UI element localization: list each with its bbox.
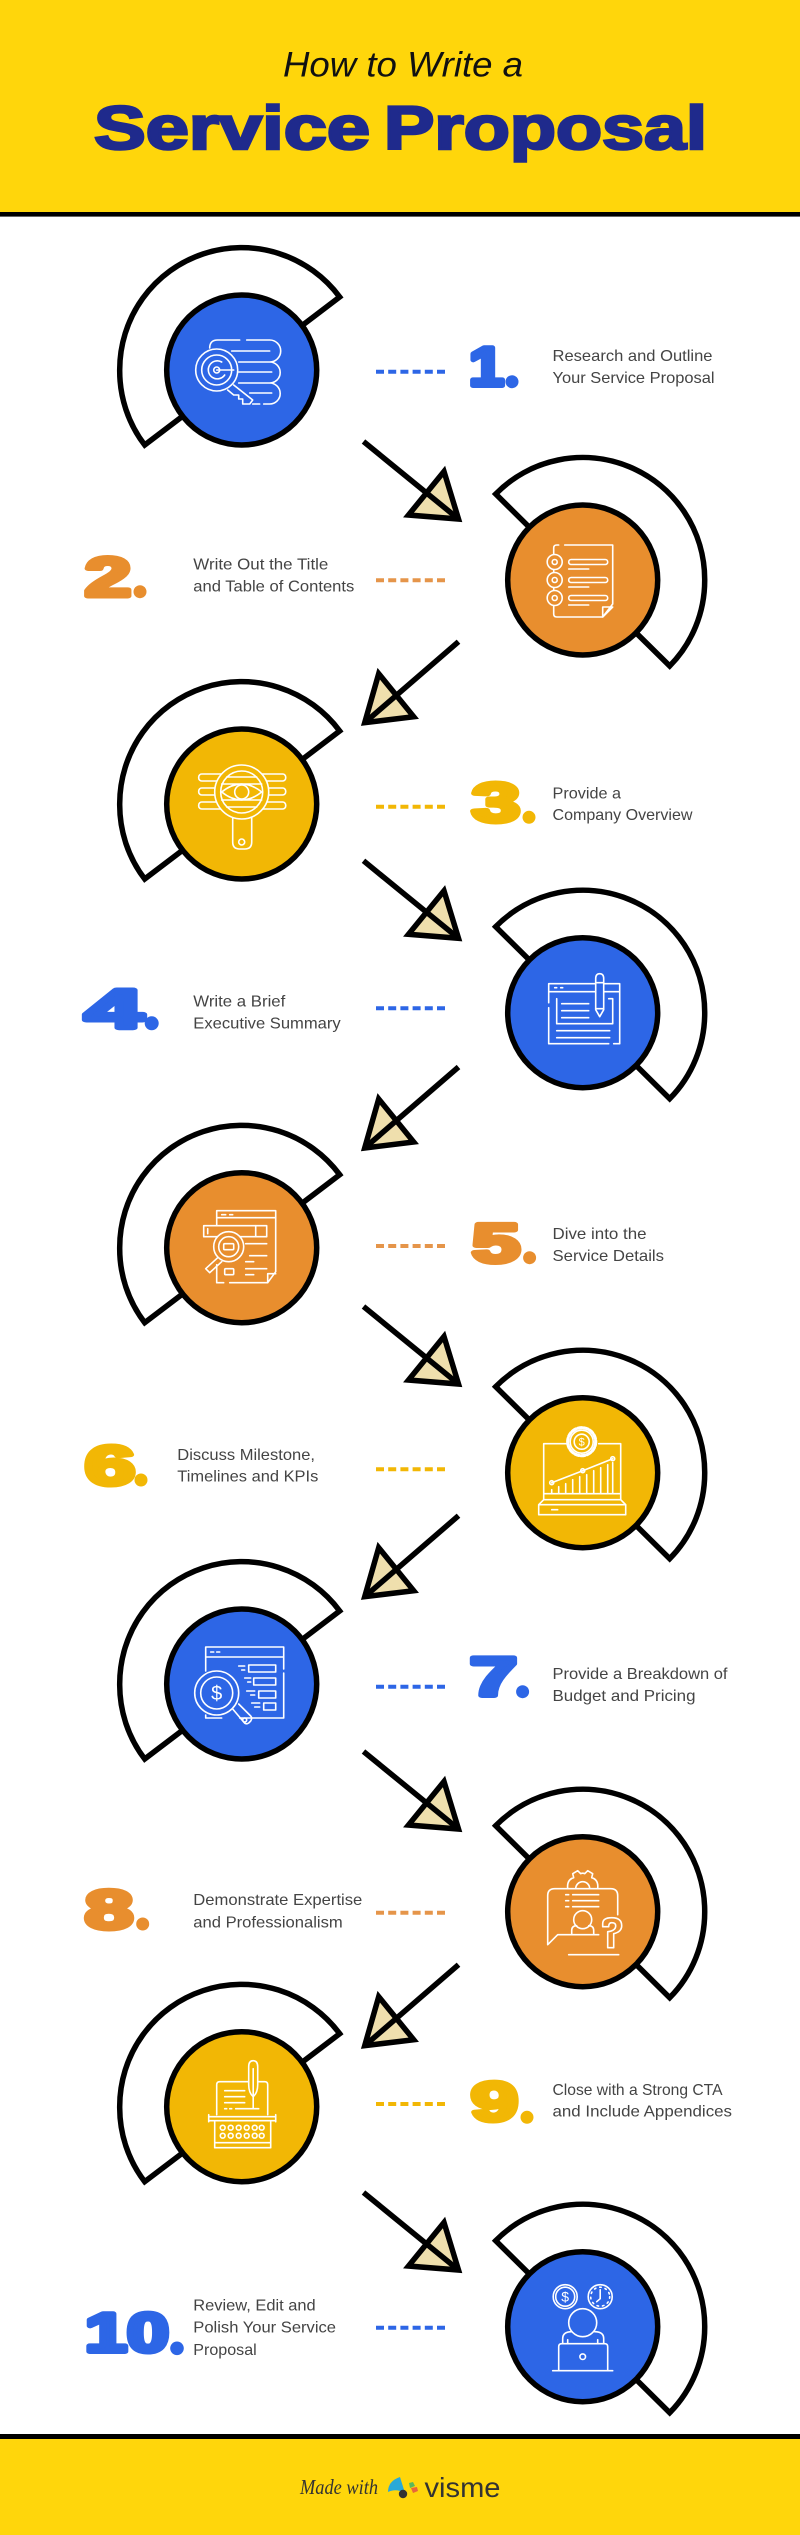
- ring and circle with browser and pen icon: [496, 890, 705, 1099]
- step 5: [120, 1125, 664, 1323]
- arrow 8 to 9: [365, 1965, 458, 2046]
- step text: Provide a Breakdown of: [552, 1666, 728, 1683]
- number 4: [85, 978, 159, 1040]
- arrow 5 to 6: [364, 1306, 458, 1384]
- step text: Research and Outline: [552, 348, 713, 365]
- step text: Write Out the Title: [193, 556, 328, 573]
- step text: Company Overview: [552, 807, 693, 824]
- ring and circle with typewriter icon: [120, 1984, 340, 2182]
- step text: Write a Brief: [193, 994, 286, 1011]
- ring and circle with budget magnifier icon: [120, 1562, 340, 1759]
- step text: [552, 348, 714, 387]
- connector: [376, 2102, 445, 2106]
- step text: and Include Appendices: [552, 2104, 732, 2121]
- title line 2: [94, 94, 707, 162]
- connector: [376, 1244, 445, 1248]
- step text: Service Details: [552, 1248, 664, 1265]
- step 1: [120, 248, 714, 445]
- title line 2: Proposal: [384, 94, 707, 162]
- ring and circle with key icon: [120, 248, 340, 445]
- number 6: [85, 1434, 148, 1496]
- number 9: 9: [471, 2070, 518, 2132]
- arrow 1 to 2: [364, 442, 458, 519]
- step text: Dive into the: [552, 1226, 647, 1243]
- ring and circle with report and magnifier icon: [120, 1125, 340, 1323]
- step 2: [85, 458, 705, 666]
- number 6: 6: [85, 1434, 135, 1496]
- step text: [193, 1892, 362, 1931]
- number 9: [471, 2070, 534, 2132]
- arrow 2 to 3: [365, 642, 458, 723]
- step text: [177, 1447, 318, 1486]
- step text: Demonstrate Expertise: [193, 1892, 362, 1909]
- ring and circle with person at laptop icon: $: [561, 2289, 569, 2305]
- step text: [193, 2298, 336, 2359]
- number 5: [472, 1212, 536, 1274]
- connector: [376, 578, 445, 582]
- visme logo mark: [388, 2477, 418, 2498]
- number 10: [85, 2302, 184, 2364]
- step text: [552, 1666, 728, 1705]
- step text: [552, 785, 693, 824]
- number 3: 3: [472, 772, 520, 834]
- ring and circle with laptop chart icon: [496, 1350, 705, 1559]
- visme wordmark: visme: [424, 2472, 500, 2503]
- number 1: [469, 336, 518, 398]
- step 6: [85, 1350, 705, 1559]
- ring and circle with expert chat icon: [496, 1789, 705, 1998]
- title line 1: How to Write a: [283, 46, 523, 84]
- number 8: 8: [85, 1878, 133, 1940]
- step text: and Table of Contents: [193, 578, 354, 595]
- ring and circle with document icon: [496, 458, 705, 666]
- arrow 9 to 10: [364, 2192, 458, 2270]
- arrow 3 to 4: [364, 861, 458, 938]
- connector: [376, 2326, 445, 2330]
- number 2: [85, 546, 146, 608]
- step 4: [85, 890, 705, 1099]
- connector: [376, 805, 445, 809]
- footer banner: [0, 2434, 800, 2535]
- step text: Budget and Pricing: [552, 1688, 696, 1705]
- step text: Polish Your Service: [193, 2320, 336, 2337]
- arrow 6 to 7: [365, 1516, 458, 1597]
- step 7: [120, 1562, 728, 1759]
- step text: [193, 994, 341, 1033]
- step text: Timelines and KPIs: [177, 1469, 318, 1486]
- number 8: [85, 1878, 149, 1940]
- number 2: 2: [85, 546, 131, 608]
- connector: [376, 370, 445, 374]
- title line 2: Service: [94, 94, 370, 162]
- number 1: 1: [469, 336, 504, 398]
- arrow 7 to 8: [364, 1752, 458, 1829]
- ring and circle with person at laptop icon: [496, 2204, 705, 2413]
- header banner: [0, 0, 800, 217]
- step 8: [85, 1789, 705, 1998]
- step text: [552, 1226, 664, 1265]
- ring and circle with magnifier icon: [120, 682, 340, 879]
- number 3: [472, 772, 536, 834]
- number 4: 4: [85, 978, 144, 1040]
- number 7: [470, 1646, 529, 1708]
- connector: [376, 1911, 445, 1915]
- step text: Proposal: [193, 2342, 257, 2359]
- arrow 4 to 5: [365, 1067, 458, 1148]
- step text: Discuss Milestone,: [177, 1447, 315, 1464]
- step text: Your Service Proposal: [552, 370, 714, 387]
- step text: [552, 2082, 732, 2121]
- step text: Close with a Strong CTA: [552, 2082, 723, 2099]
- step text: Provide a: [552, 785, 621, 802]
- connector: [376, 1006, 445, 1010]
- ring and circle with laptop chart icon: $: [579, 1437, 585, 1449]
- step text: and Professionalism: [193, 1914, 343, 1931]
- made with label: Made with: [299, 2475, 378, 2499]
- number 5: 5: [472, 1212, 520, 1274]
- step text: [193, 556, 354, 595]
- step 9: [120, 1984, 732, 2182]
- number 10: 10: [85, 2302, 169, 2364]
- step 10: [85, 2204, 705, 2413]
- number 7: 7: [470, 1646, 517, 1708]
- step text: Executive Summary: [193, 1016, 341, 1033]
- connector: [376, 1467, 445, 1471]
- step text: Review, Edit and: [193, 2298, 316, 2315]
- ring and circle with budget magnifier icon: $: [211, 1683, 222, 1705]
- step 3: [120, 682, 693, 879]
- connector: [376, 1685, 445, 1689]
